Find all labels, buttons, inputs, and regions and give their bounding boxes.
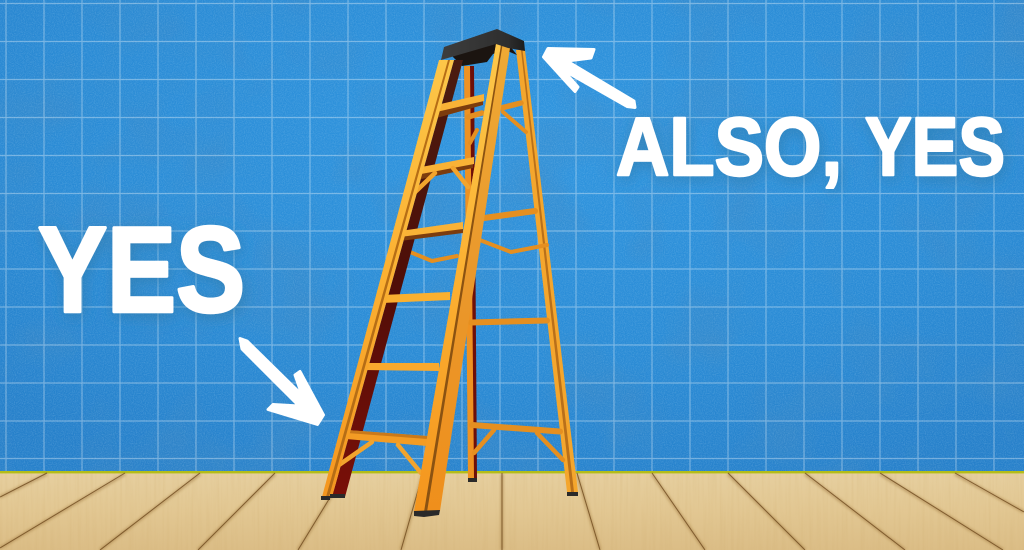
rung 4 — [382, 292, 450, 303]
heading: YES: YES — [38, 202, 245, 338]
front left rail — [322, 60, 454, 497]
black top cap — [441, 29, 525, 60]
front braces — [339, 168, 468, 473]
shadow under top cap — [450, 42, 517, 66]
rear right leg — [516, 50, 578, 492]
front rungs — [339, 94, 484, 473]
front right rail — [414, 44, 510, 512]
arrow: pointing to ladder top — [544, 48, 635, 108]
heading: ALSO, YES — [616, 100, 1005, 193]
rung 1 — [432, 94, 484, 119]
heading: ALSO, YES: ALSO, — [616, 100, 842, 193]
rear left leg — [464, 66, 477, 478]
rung 2 — [416, 157, 474, 180]
rung 3 — [400, 222, 463, 241]
rubber feet — [321, 478, 578, 517]
rung 5 — [364, 363, 439, 371]
wooden floor — [0, 471, 1024, 550]
stepladder — [321, 29, 578, 517]
platform step — [346, 430, 427, 446]
rear rungs and braces — [410, 103, 563, 460]
front left rear shadow rail — [332, 60, 463, 497]
arrow: pointing to ladder bottom — [240, 338, 324, 424]
